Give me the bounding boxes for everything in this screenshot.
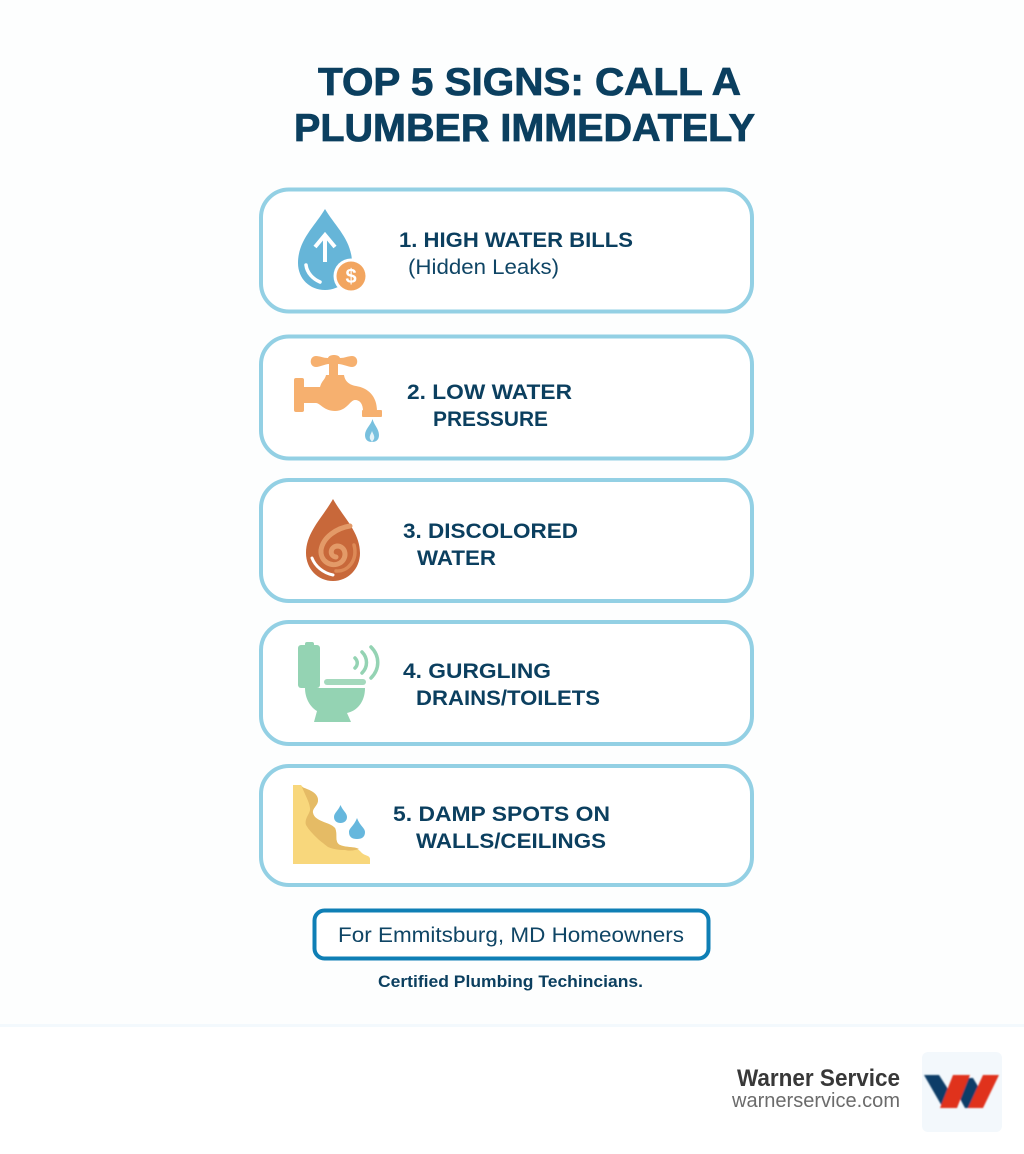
footer brand text: Warner Service [737, 1065, 900, 1092]
text: hidden leaks: (Hidden Leaks) [408, 256, 559, 279]
heading: low water pressure: 2. LOW WATER [407, 381, 572, 404]
callout: location: For Emmitsburg, MD Homeowners [338, 924, 684, 947]
heading: discolored water [403, 520, 578, 570]
heading: damp spots on walls and ceilings [393, 803, 610, 853]
icon: damp wall with drips [293, 785, 370, 864]
heading: low water pressure: PRESSURE [433, 408, 548, 431]
heading: high water bills: 1. HIGH WATER BILLS [399, 229, 633, 252]
title: PLUMBER IMMEDATELY [294, 107, 755, 150]
icon: gurgling toilet [298, 642, 378, 722]
icon: dripping faucet [294, 355, 382, 442]
heading: low water pressure [407, 381, 572, 431]
panel: damp spots on walls and ceilings [261, 766, 752, 885]
title [294, 61, 755, 150]
heading: gurgling drains and toilets: DRAINS/TOILETS [416, 687, 600, 710]
heading: discolored water: WATER [417, 547, 496, 570]
heading: damp spots on walls and ceilings: 5. DAMP SPOTS ON [393, 803, 610, 826]
footer brand text [731, 1065, 900, 1112]
heading: damp spots on walls and ceilings: WALLS/CEILINGS [416, 830, 606, 853]
panel: discolored water [261, 480, 752, 601]
panel: gurgling drains and toilets [261, 622, 752, 744]
text: certification line: Certified Plumbing Techincians. [378, 972, 643, 991]
callout: location [314, 910, 708, 958]
panel: high water bills [261, 190, 752, 312]
heading: discolored water: 3. DISCOLORED [403, 520, 578, 543]
footer brand text: warnerservice.com [731, 1090, 900, 1112]
panel: low water pressure [261, 336, 752, 458]
title: TOP 5 SIGNS: CALL A [318, 61, 741, 104]
heading: gurgling drains and toilets [403, 660, 600, 710]
icon: Warner logo [922, 1052, 1002, 1132]
icon: water drop with dollar coin [298, 209, 368, 294]
icon: water drop with dollar coin: $ [345, 266, 357, 288]
icon: rust-colored drop [306, 499, 360, 581]
heading: gurgling drains and toilets: 4. GURGLING [403, 660, 551, 683]
